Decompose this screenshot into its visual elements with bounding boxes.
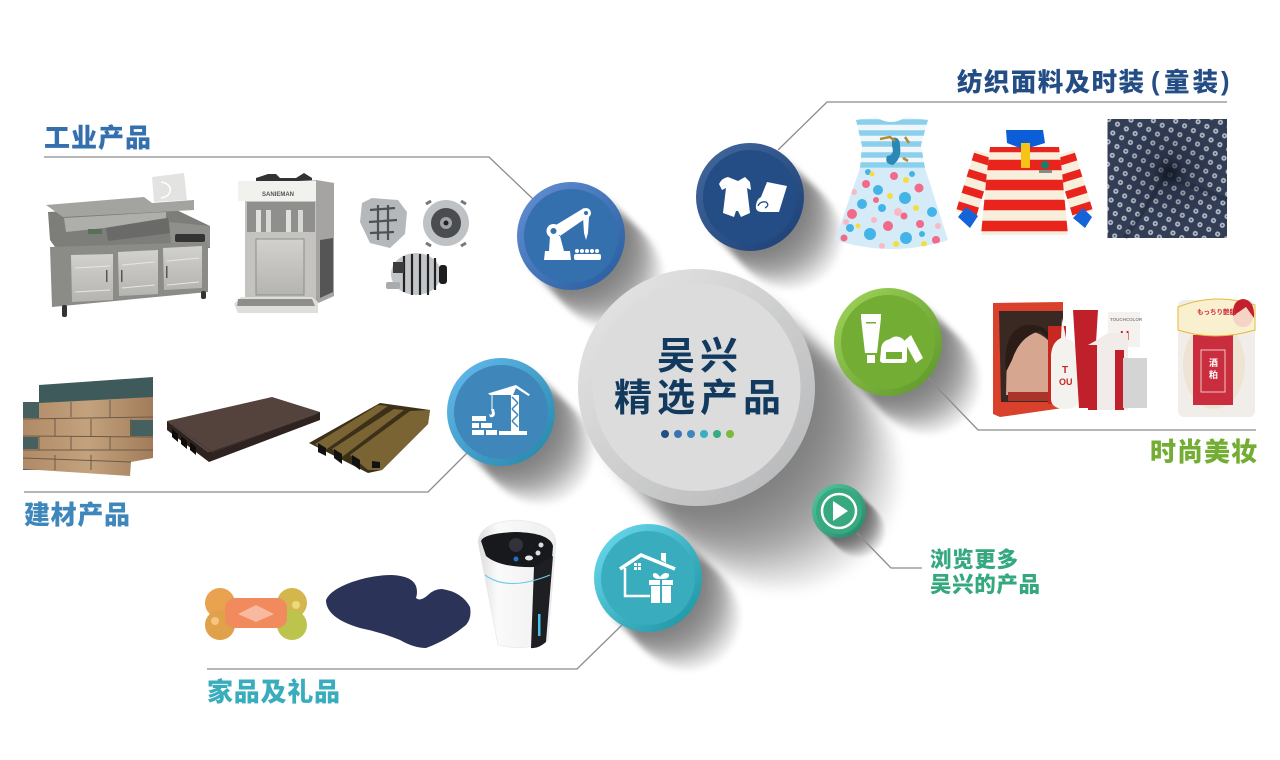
product: slush machine: SANIEMAN <box>262 192 294 198</box>
product: hair dye kit: H <box>1120 328 1129 343</box>
product: wood wall panel <box>309 403 430 473</box>
product: patterned fabric swatch <box>1108 119 1227 238</box>
product: hair dye kit: T <box>1062 365 1068 376</box>
heading: textiles and fashion <box>957 68 1230 97</box>
product: humidifier <box>478 520 556 648</box>
product: slush machine <box>234 173 334 313</box>
badge: cosmetics <box>834 288 942 396</box>
product: sake face mask pack: もっちり艶肌 <box>1197 307 1236 316</box>
product: striped polo shirt <box>958 130 1092 240</box>
centre title: 吴兴 <box>657 336 738 378</box>
product: sake face mask pack <box>1178 299 1255 417</box>
product: hair dye kit <box>993 302 1147 417</box>
product: seat cushion <box>326 575 470 648</box>
product: composite decking board <box>167 397 320 462</box>
call to action text <box>930 548 1040 597</box>
heading: building materials: 建材产品 <box>24 500 130 530</box>
play button <box>812 484 866 538</box>
call to action text: 吴兴的产品 <box>930 572 1040 597</box>
centre title <box>614 336 781 420</box>
product: dress <box>835 117 948 249</box>
badge: crane and bricks <box>447 358 555 466</box>
heading: textiles and fashion: ) <box>1221 68 1230 96</box>
product: chew bone toy <box>205 588 307 640</box>
centre title: 精选产品 <box>614 378 781 420</box>
heading: home and gifts: 家品及礼品 <box>207 677 340 707</box>
product: sake face mask pack: 酒 <box>1209 358 1218 368</box>
badge: industrial robot arm <box>517 182 625 290</box>
centre circle <box>578 269 815 506</box>
product: hair dye kit: OU <box>1059 377 1072 387</box>
call to action text: 浏览更多 <box>930 548 1018 572</box>
heading: fashion and beauty: 时尚美妆 <box>1150 437 1257 467</box>
badge: house and gift <box>594 524 702 632</box>
heading: textiles and fashion: 纺织面料及时装 <box>957 68 1144 97</box>
product: alternators <box>360 198 469 295</box>
centre colour dots <box>661 430 734 438</box>
heading: industrial products: 工业产品 <box>44 123 151 153</box>
product: sake face mask pack: 粕 <box>1209 369 1218 380</box>
badge: clothing and fabric roll <box>696 143 804 251</box>
heading: textiles and fashion: ( <box>1151 68 1160 96</box>
product: book binding machine <box>46 173 210 317</box>
product: hair dye kit: TOUCHCOLOR <box>1110 317 1143 322</box>
product: roofing shingles <box>23 377 153 476</box>
heading: textiles and fashion: 童装 <box>1164 68 1218 97</box>
